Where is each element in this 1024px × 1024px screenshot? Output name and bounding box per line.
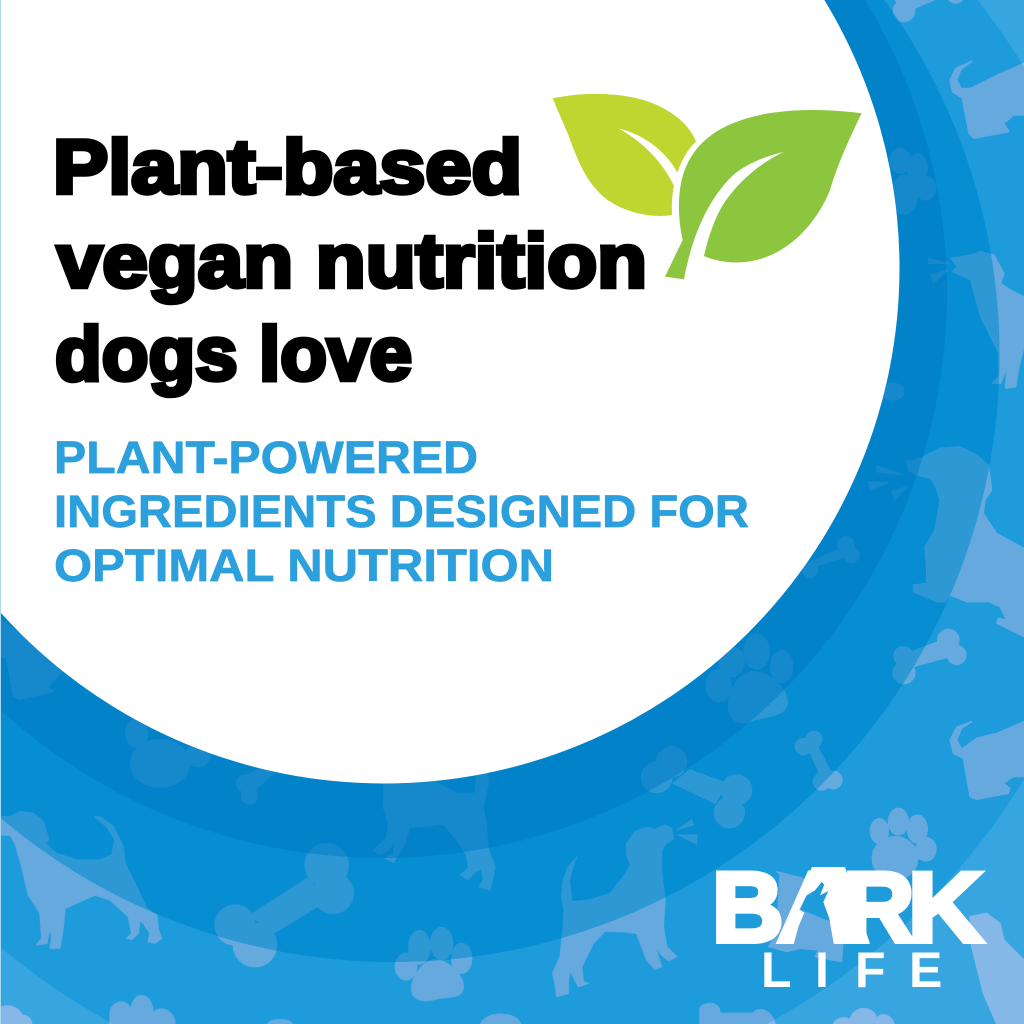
subtitle [54, 432, 749, 591]
title: vegan nutrition [57, 219, 647, 304]
white circle panel [0, 0, 900, 784]
title [53, 125, 647, 397]
pattern: dogs, bones and paws on darkest band [1, 148, 946, 858]
logo: Bark Life [716, 867, 988, 988]
logo: Bark Life: A [777, 853, 864, 963]
title: dogs love [55, 312, 412, 397]
logo: Bark Life: K [908, 852, 983, 963]
subtitle: OPTIMAL NUTRITION [54, 540, 554, 591]
logo: Bark Life: LIFE [761, 942, 942, 998]
icon: two green leaves [553, 94, 862, 279]
subtitle: INGREDIENTS DESIGNED FOR [54, 486, 749, 537]
logo: Bark Life: B [712, 852, 784, 962]
subtitle: PLANT-POWERED [54, 432, 478, 483]
band: darkest blue ring [0, 0, 947, 858]
decorative left edge [0, 0, 1, 1024]
logo: Bark Life: R [843, 852, 914, 962]
title: Plant-based [53, 125, 522, 210]
